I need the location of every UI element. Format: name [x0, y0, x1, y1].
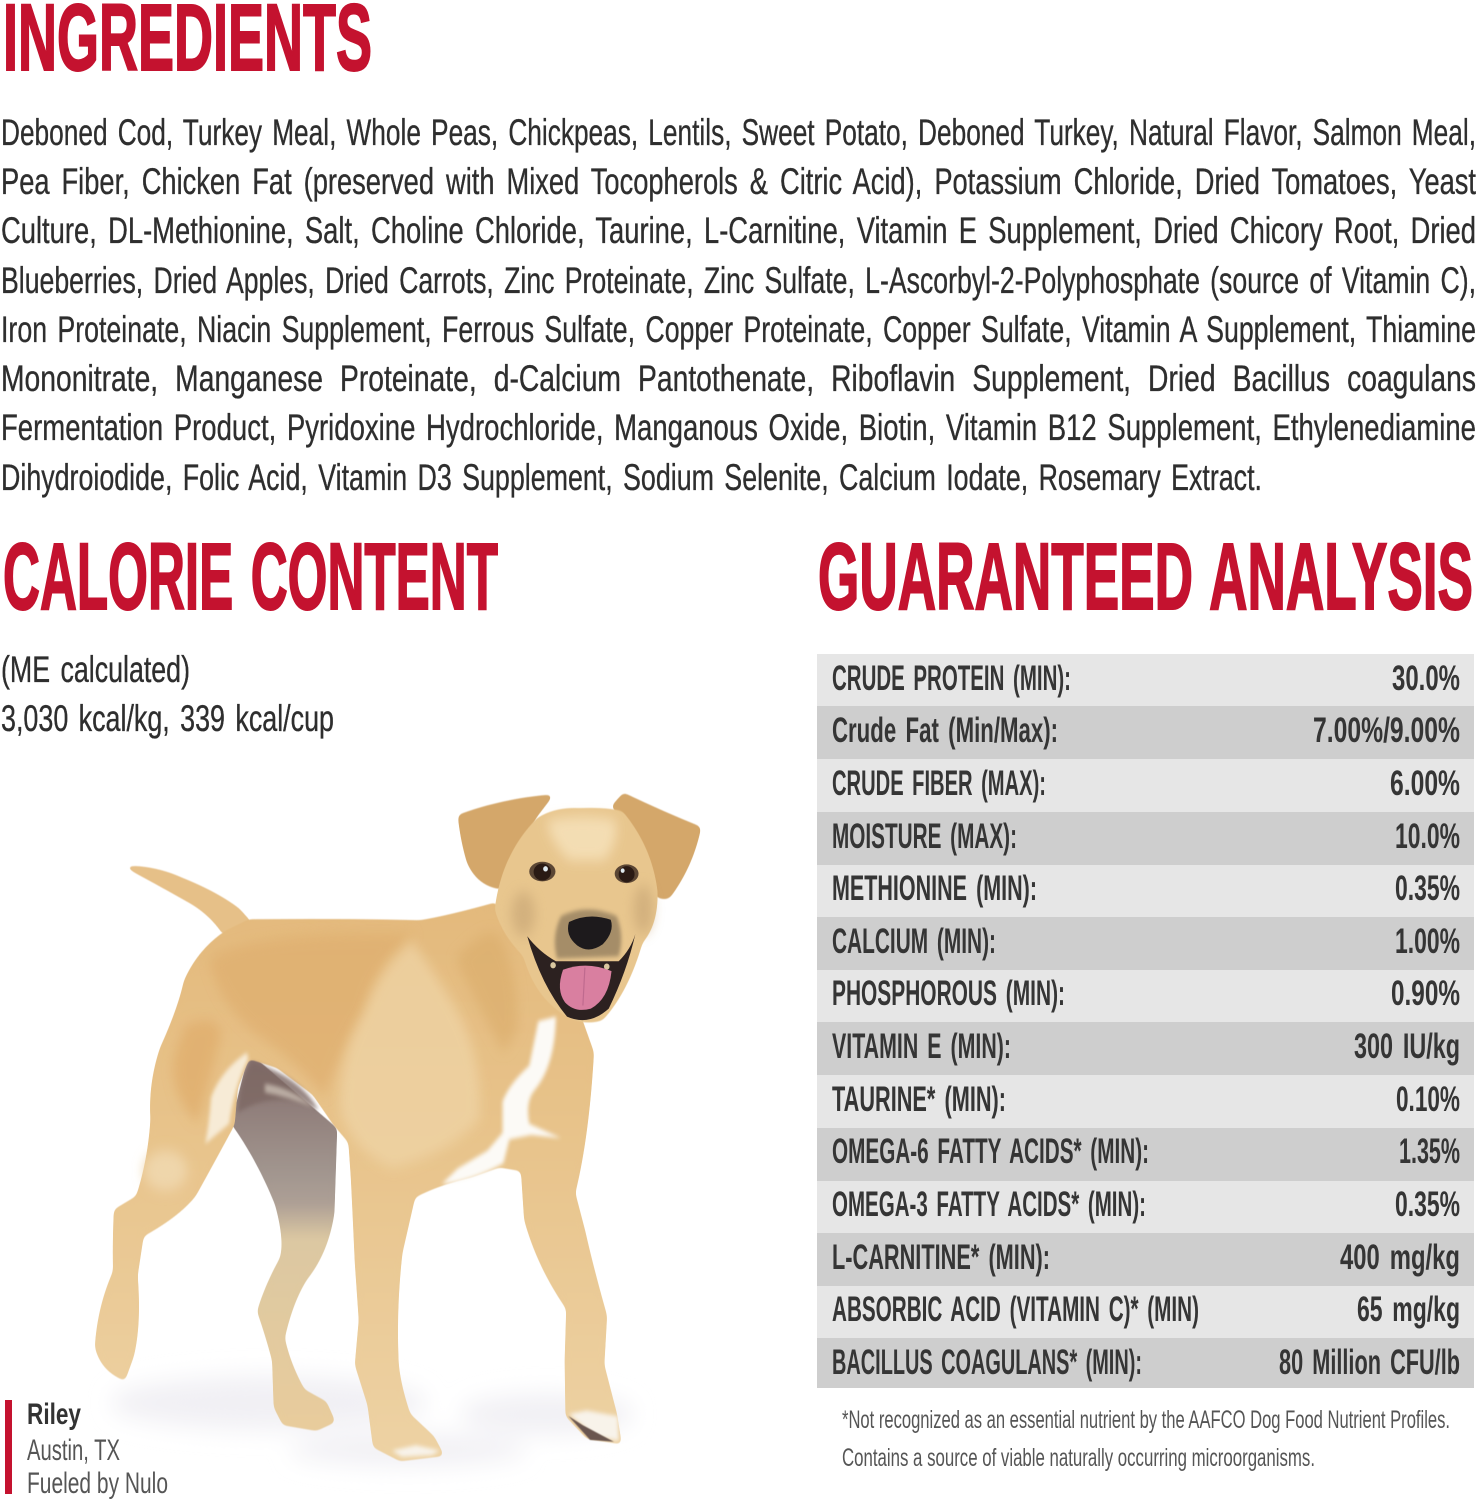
tongue crease [583, 968, 585, 1005]
tail [122, 866, 253, 935]
pale fur band over far leg [265, 1084, 315, 1108]
hip patch [173, 1021, 221, 1124]
row: moisture [832, 817, 1460, 856]
row: bacillus coagulans: BACILLUS COAGULANS* (MIN): [832, 1343, 1142, 1382]
neck shading [456, 933, 517, 1052]
cheek shading [511, 885, 653, 936]
row: crude fat [832, 711, 1460, 750]
row: omega-3: OMEGA-3 FATTY ACIDS* (MIN): [832, 1185, 1146, 1224]
nose [568, 916, 612, 949]
heading: calorie content: CALORIE CONTENT [3, 524, 498, 630]
footnote [842, 1406, 1450, 1472]
tongue [560, 966, 612, 1010]
row: methionine [832, 869, 1460, 908]
row: crude protein: CRUDE PROTEIN (MIN): [832, 659, 1071, 698]
knee highlight [144, 1151, 187, 1191]
row: crude fiber: CRUDE FIBER (MAX): [832, 764, 1046, 803]
row: l-carnitine [832, 1238, 1460, 1277]
caption: riley: Austin, TX [27, 1434, 120, 1467]
row: phosphorous [832, 974, 1460, 1013]
light shoulder [340, 941, 480, 1168]
row: omega-6: OMEGA-6 FATTY ACIDS* (MIN): [832, 1132, 1149, 1171]
dog body [95, 902, 622, 1461]
row: moisture: MOISTURE (MAX): [832, 817, 1017, 856]
dark paw pad [568, 1416, 614, 1442]
calorie content text [1, 649, 334, 739]
floor shadow [110, 1376, 635, 1465]
calorie content text: (ME calculated) [1, 649, 190, 690]
row: taurine: TAURINE* (MIN): [832, 1080, 1006, 1119]
right eye [615, 864, 639, 883]
row: calcium: CALCIUM (MIN): [832, 922, 996, 961]
caption accent bar [5, 1400, 12, 1494]
row: taurine [832, 1080, 1460, 1119]
white chest [442, 1017, 561, 1184]
right ear [611, 793, 701, 899]
mouth [527, 934, 635, 1020]
pale back-thigh strip [205, 1052, 248, 1144]
head [495, 808, 658, 1022]
orange back fur [209, 933, 416, 1097]
inner thigh shadow [238, 1062, 319, 1113]
row: crude protein [832, 659, 1460, 698]
paw tips [392, 1410, 619, 1457]
caption: riley: Fueled by Nulo [27, 1467, 168, 1500]
left ear [458, 794, 554, 889]
muzzle [555, 909, 621, 959]
row: calcium [832, 922, 1460, 961]
ingredients text block [1, 112, 1477, 498]
left eye [529, 862, 555, 881]
forehead highlight [547, 817, 616, 860]
teeth hints [550, 962, 610, 970]
caption: riley [27, 1398, 168, 1500]
far hind leg [231, 1052, 337, 1431]
calorie content text: 3,030 kcal/kg, 339 kcal/cup [1, 698, 334, 739]
row: crude fat: Crude Fat (Min/Max): [832, 711, 1058, 750]
guaranteed analysis table [817, 654, 1474, 1388]
row: vitamin e [832, 1027, 1460, 1066]
row: phosphorous: PHOSPHOROUS (MIN): [832, 974, 1065, 1013]
row: methionine: METHIONINE (MIN): [832, 869, 1037, 908]
caption: riley: Riley [27, 1398, 81, 1431]
row: vitamin e: VITAMIN E (MIN): [832, 1027, 1011, 1066]
row: l-carnitine: L-CARNITINE* (MIN): [832, 1238, 1050, 1277]
row: crude fiber [832, 764, 1460, 803]
dog photo illustration [95, 793, 701, 1465]
row: absorbic acid: ABSORBIC ACID (VITAMIN C)* (MIN) [832, 1290, 1199, 1329]
